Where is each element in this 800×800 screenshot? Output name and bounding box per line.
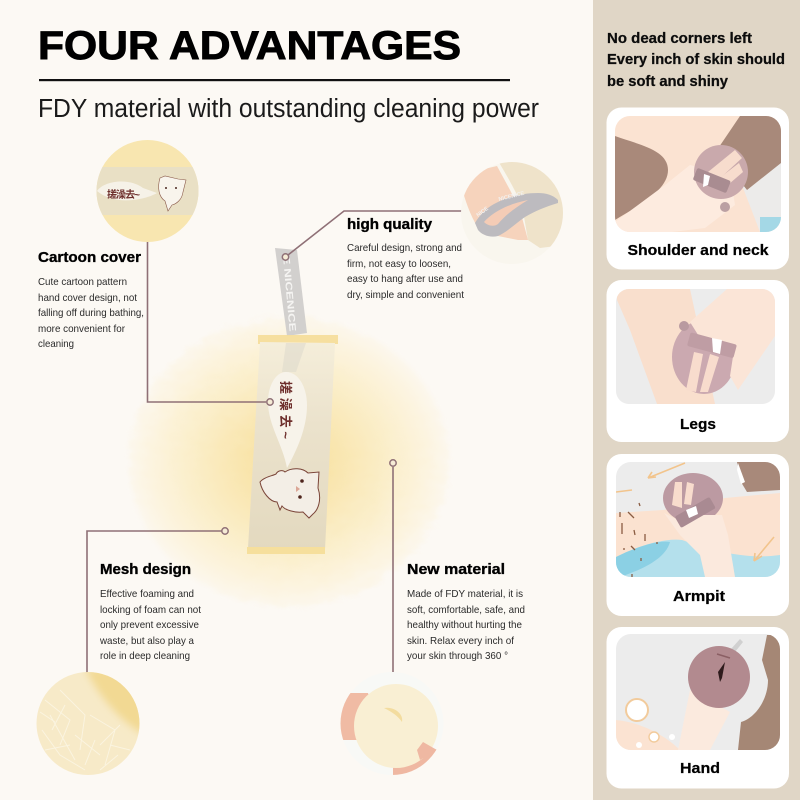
- label: Armpit: [673, 588, 725, 605]
- label: Legs: [680, 416, 716, 433]
- connector node: [222, 528, 228, 534]
- body text: locking of foam can not: [100, 605, 201, 616]
- hanging strap: [275, 248, 307, 336]
- card: legs: [606, 280, 789, 442]
- sidebar intro text: Every inch of skin should: [607, 52, 785, 68]
- title underline: [39, 79, 510, 81]
- circular photo: strap loop: NICE: [476, 206, 490, 219]
- card: shoulder and neck: [606, 108, 789, 270]
- connector line: [148, 240, 266, 402]
- sidebar intro text: be soft and shiny: [607, 74, 728, 90]
- puff body: [123, 312, 455, 612]
- top stitched edge: [258, 335, 338, 344]
- connector node: [282, 254, 289, 260]
- callout: mesh design: [36, 528, 228, 776]
- body text: waste, but also play a: [99, 636, 194, 647]
- sidebar intro text: [607, 31, 785, 90]
- heading: Mesh design: [100, 562, 191, 578]
- body text: dry, simple and convenient: [347, 290, 464, 301]
- illustration: armpit: [616, 462, 780, 577]
- heading: high quality: [347, 217, 432, 233]
- hanging strap: E NICENICE: [280, 255, 298, 332]
- body text: healthy without hurting the: [407, 620, 522, 631]
- body text: role in deep cleaning: [100, 651, 190, 662]
- connector line: [288, 211, 462, 255]
- body text: [99, 589, 201, 662]
- connector node: [267, 399, 273, 405]
- body text: [347, 243, 464, 301]
- title: FOUR ADVANTAGES: [38, 24, 461, 68]
- product: yellow bath puff with label: [123, 248, 455, 612]
- connector node: [390, 460, 396, 466]
- circular photo: cartoon cover: [96, 139, 199, 243]
- heading: Cartoon cover: [38, 250, 141, 266]
- body text: cleaning: [38, 339, 74, 350]
- body text: Careful design, strong and: [347, 243, 462, 254]
- body text: only prevent excessive: [100, 620, 199, 631]
- sidebar panel: [593, 0, 800, 800]
- fabric label: [248, 342, 335, 550]
- bottom stitched edge: [247, 547, 325, 554]
- body text: easy to hang after use and: [347, 274, 463, 285]
- connector line: [392, 467, 394, 672]
- circular photo: hands holding puff: [340, 684, 438, 775]
- body text: falling off during bathing,: [38, 308, 144, 319]
- circular photo: strap loop: [461, 162, 563, 248]
- strap shadow on label: [282, 343, 306, 372]
- body text: Made of FDY material, it is: [407, 589, 523, 600]
- body text: hand cover design, not: [38, 293, 137, 304]
- cat mascot: [260, 469, 320, 518]
- speech bubble: [268, 372, 307, 468]
- circular photo: cartoon cover: 搓澡去~: [107, 188, 140, 201]
- body text: Effective foaming and: [100, 589, 194, 600]
- illustration: shoulder and neck: [615, 116, 781, 232]
- label: Shoulder and neck: [628, 242, 769, 259]
- callout: new material: [340, 460, 525, 776]
- sidebar intro text: No dead corners left: [607, 31, 752, 47]
- heading: New material: [407, 562, 505, 578]
- speech bubble: 搓澡去~: [278, 381, 293, 439]
- body text: [38, 277, 144, 350]
- body text: firm, not easy to loosen,: [347, 259, 451, 270]
- illustration: legs: [616, 289, 775, 404]
- callout: high quality: [282, 161, 564, 301]
- body text: more convenient for: [38, 324, 125, 335]
- body text: your skin through 360 °: [407, 651, 508, 662]
- connector line: [87, 531, 222, 674]
- body text: soft, comfortable, safe, and: [407, 605, 525, 616]
- body text: Cute cartoon pattern: [38, 277, 127, 288]
- body text: skin. Relax every inch of: [407, 636, 514, 647]
- body text: [407, 589, 525, 662]
- card: hand: [606, 627, 789, 788]
- circular photo: strap loop: NICENICE: [498, 191, 525, 203]
- circular photo: mesh texture: [36, 668, 145, 776]
- callout: cartoon cover: [38, 139, 273, 405]
- illustration: hand: [616, 634, 780, 750]
- subtitle: FDY material with outstanding cleaning power: [38, 95, 539, 123]
- label: Hand: [680, 760, 720, 777]
- card: armpit: [606, 454, 789, 616]
